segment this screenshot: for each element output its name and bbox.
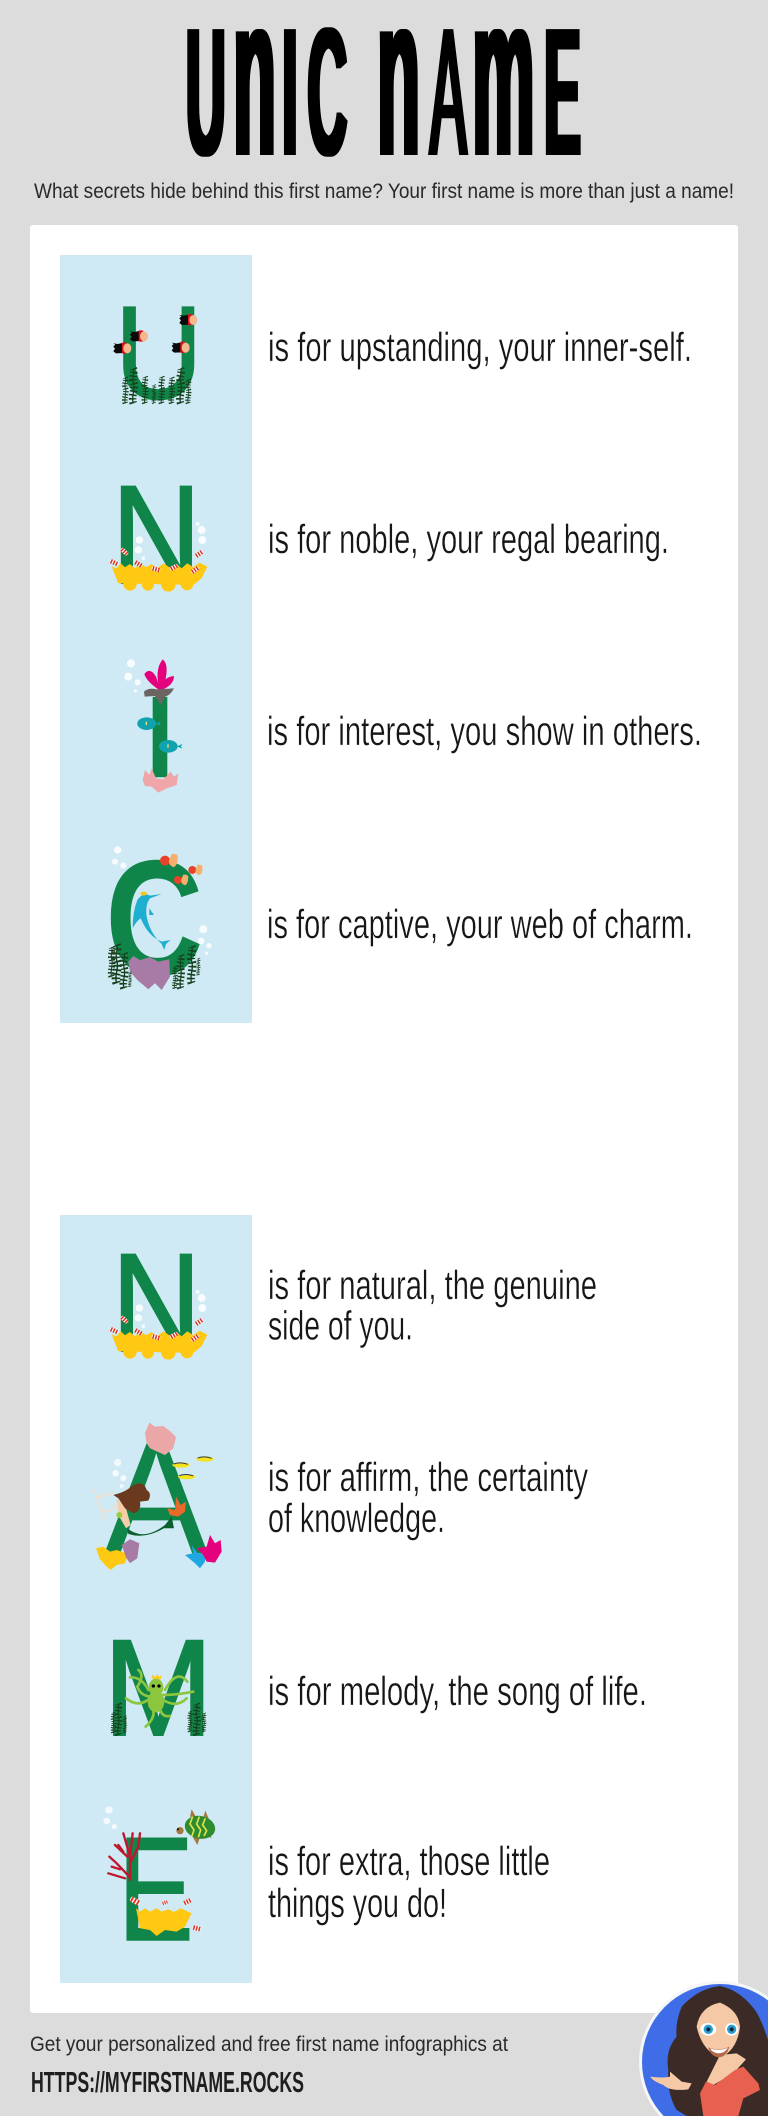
text: second N row — [268, 1262, 597, 1348]
icon: letter I with anemone, fish and coral — [124, 659, 182, 802]
panel: blue strip for NAME — [60, 1215, 252, 1983]
icon: second letter N with sponge and clownfish: N — [112, 1225, 201, 1382]
icon: letter M with octopus and seaweed: M — [103, 1611, 213, 1765]
text: second N row: is for natural, the genuine — [268, 1262, 597, 1308]
text: A row: of knowledge. — [268, 1495, 445, 1541]
icon: avatar of woman in circle — [639, 1981, 768, 2116]
icon: letter N with sponge and clownfish: N — [112, 457, 201, 614]
text: second N row: side of you. — [268, 1302, 413, 1348]
panel: blue strip for UNIC — [60, 255, 252, 1023]
icon: letter E with turtle, coral and sponge: E — [118, 1806, 194, 1971]
icon: letter E with turtle, coral and sponge — [103, 1806, 217, 1971]
icon: letter U with fish and seaweed: U — [114, 279, 203, 428]
text: E row: is for extra, those little — [268, 1838, 550, 1884]
text: A row: is for affirm, the certainty — [268, 1454, 588, 1500]
footer text: Get your personalized and free first name infographics at — [30, 2033, 508, 2056]
text: E row — [268, 1838, 550, 1926]
text: E row: things you do! — [268, 1880, 447, 1926]
footer url: HTTPS://MYFIRSTNAME.ROCKS — [31, 2067, 304, 2099]
icon: letter C with dolphin, fish and coral: C — [105, 827, 203, 1011]
panel: main white card — [30, 225, 738, 2013]
icon: letter A with mermaid, fish and corals: A — [105, 1405, 207, 1588]
icon: letter I with anemone, fish and coral: I — [139, 673, 181, 802]
text: A row — [268, 1454, 588, 1541]
